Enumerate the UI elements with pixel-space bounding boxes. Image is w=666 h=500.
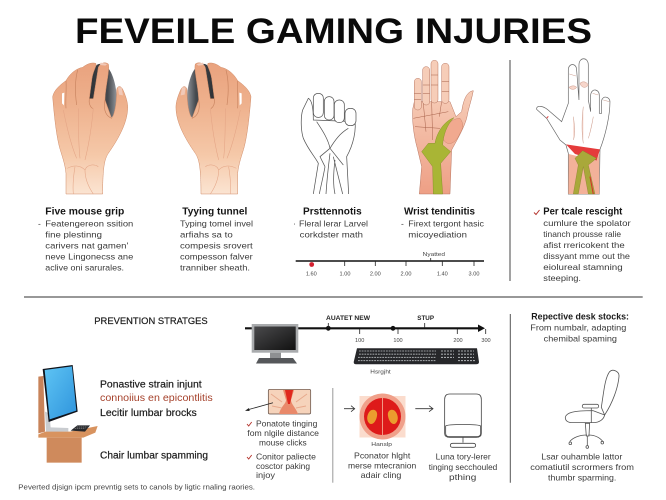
text block: per tcale rescight: dissyant mme out the [543, 251, 630, 261]
timeline axis: injuries [296, 252, 484, 278]
text block: typing tunnel: compesson falver [180, 252, 253, 262]
text block: per tcale rescight: eiolureal stamning [543, 262, 623, 272]
text block: five mouse grip: neve Lingonecss ane [45, 252, 134, 262]
heading: per tcale rescight: Per tcale rescight [543, 206, 623, 218]
illustration: hand on mouse, right [176, 63, 251, 194]
text block: chair note: comatiutil scrormers from [530, 462, 634, 472]
title: FEVEILE GAMING INJURIES [75, 12, 592, 51]
panel: repective desk stocks [530, 311, 634, 483]
arrow: thumbnail to list [245, 403, 273, 411]
text block: per tcale rescight: afist rrericokent the [543, 240, 625, 250]
text block: wrist tendinitis: micoyediation [408, 230, 467, 240]
icon: inflamed tendon thumbnail [268, 389, 311, 414]
timeline axis: setup: 200 [453, 338, 463, 344]
text block: per tcale rescight: steeping. [543, 273, 581, 283]
timeline axis: injuries: 2.00 [370, 272, 381, 278]
arrow: to chair icon [415, 406, 433, 412]
text block: wrist tendinitis [401, 219, 484, 240]
text block: typing tunnel: arfiahs sa to [180, 230, 233, 240]
text block: chair [429, 451, 498, 482]
icon: keyboard [354, 348, 479, 364]
text block: repective desk stocks [530, 323, 627, 343]
timeline axis: injuries: 1.40 [437, 272, 448, 278]
footnote: Peverted djsign ipcm prevntig sets to canols by ligtic rnaling raories. [18, 482, 255, 491]
illustration: line drawing of fist [301, 93, 356, 194]
heading: five mouse grip: Five mouse grip [45, 206, 124, 218]
text block: typing tunnel: compesis srovert [180, 241, 253, 251]
illustration: palm with highlighted tendons [413, 60, 473, 194]
text block: five mouse grip: Featengereon ssition [45, 219, 134, 229]
illustration: hand with red wrist area [537, 59, 610, 194]
text block: chair: tinging secchouled [429, 462, 498, 472]
panel: wrist tendinitis [401, 60, 484, 240]
text block: chair: Luna tory-lerer [436, 451, 491, 461]
heading: prevention strategies: PREVENTION STRATGES [94, 316, 208, 327]
text block: prsttennotis: corkdster math [300, 230, 363, 240]
timeline axis: setup: 100 [393, 338, 403, 344]
icon: office chair [565, 370, 619, 448]
text block: typing tunnel [180, 219, 253, 273]
text block: wrist tendinitis: - [401, 219, 404, 229]
label: keyboard height: Hsrgjht [370, 370, 391, 376]
text block: tinging checklist [247, 419, 319, 480]
text block: prevention list: Ponastive strain injunt [100, 380, 202, 391]
text block: per tcale rescight [543, 218, 631, 283]
text block: tinging checklist: injoy [256, 470, 276, 480]
text block: hip [348, 451, 417, 480]
timeline axis: setup [245, 315, 491, 344]
text block: five mouse grip: carivers nat gamen' [45, 241, 129, 251]
label: hip: Hanslp [371, 442, 392, 448]
text block: tinging checklist: mouse clicks [259, 437, 307, 447]
text block: five mouse grip: - [38, 219, 41, 229]
timeline axis: injuries: 2.00 [401, 272, 411, 278]
icon: red hip cross-section [360, 394, 406, 440]
panel: prsttennotis [293, 93, 368, 240]
timeline axis: setup: STUP [417, 315, 435, 322]
text block: tinging checklist: Ponatote tinging [256, 419, 318, 429]
text block: prevention list: connoiius en epicontlitis [100, 393, 213, 404]
text block: hip: adair cling [361, 470, 402, 480]
text block: chair note: Lsar ouhamble lattor [541, 451, 623, 461]
text block: chair note [530, 451, 634, 483]
icon: computer monitor [252, 324, 298, 364]
text block: five mouse grip: aclive oni sarurales. [45, 263, 124, 273]
timeline axis: setup: 300 [481, 338, 491, 344]
text block: chair: pthing [449, 472, 477, 482]
heading: prsttennotis: Prsttennotis [303, 206, 362, 218]
text block: tinging checklist: fom nlgile distance [247, 428, 319, 438]
text block: prevention list: Lecitir lumbar brocks [100, 408, 197, 419]
text block: repective desk stocks: From numbalr, adapting [530, 323, 627, 333]
timeline axis: setup: 100 [355, 338, 364, 344]
text block: typing tunnel: Typing tomel invel [180, 219, 253, 229]
text block: five mouse grip: fine plestinng [45, 230, 102, 240]
text block: wrist tendinitis: Firext tergont hasic [408, 219, 484, 229]
timeline axis: injuries: 3.00 [469, 272, 479, 278]
heading: typing tunnel: Tyying tunnel [182, 206, 247, 218]
text block: repective desk stocks: chemibal spaming [544, 333, 617, 343]
arrow: to hip icon [344, 406, 355, 412]
timeline axis: injuries: Nyatted [423, 252, 445, 258]
panel: five mouse grip [38, 63, 134, 273]
timeline axis: setup: AUATET NEW [326, 315, 371, 322]
text block: prsttennotis: · [293, 219, 296, 229]
text block: five mouse grip [38, 219, 134, 273]
text block: per tcale rescight: tinanch prousse ralie [543, 229, 621, 239]
text block: prevention list: Chair lumbar spamming [100, 450, 208, 461]
panel: typing tunnel [176, 63, 253, 273]
illustration: desk with monitor and keyboard [38, 365, 98, 463]
text block: prsttennotis [293, 219, 368, 240]
text block: tinging checklist: Conitor paliecte [256, 451, 316, 461]
timeline axis: injuries: 1.60 [306, 272, 317, 278]
heading: wrist tendinitis: Wrist tendinitis [404, 206, 475, 218]
text block: prsttennotis: Fleral lerar Larvel [299, 219, 368, 229]
text block: prevention list [100, 380, 213, 461]
panel: per tcale rescight [534, 59, 631, 283]
timeline axis: injuries: 1.00 [340, 272, 350, 278]
heading: repective desk stocks: Repective desk stocks: [531, 311, 629, 322]
text block: hip: merse mtecranion [348, 461, 417, 471]
text block: typing tunnel: tranniber sheath. [180, 263, 250, 273]
text block: chair note: thumbr sparming. [548, 473, 616, 483]
text block: hip: Pconator hlght [354, 451, 411, 461]
text block: tinging checklist: cosctor paking [256, 461, 310, 471]
illustration: hand on mouse, left [53, 63, 128, 194]
icon: chair outline [445, 394, 481, 447]
text block: per tcale rescight: cumlure the spolator [543, 218, 631, 228]
